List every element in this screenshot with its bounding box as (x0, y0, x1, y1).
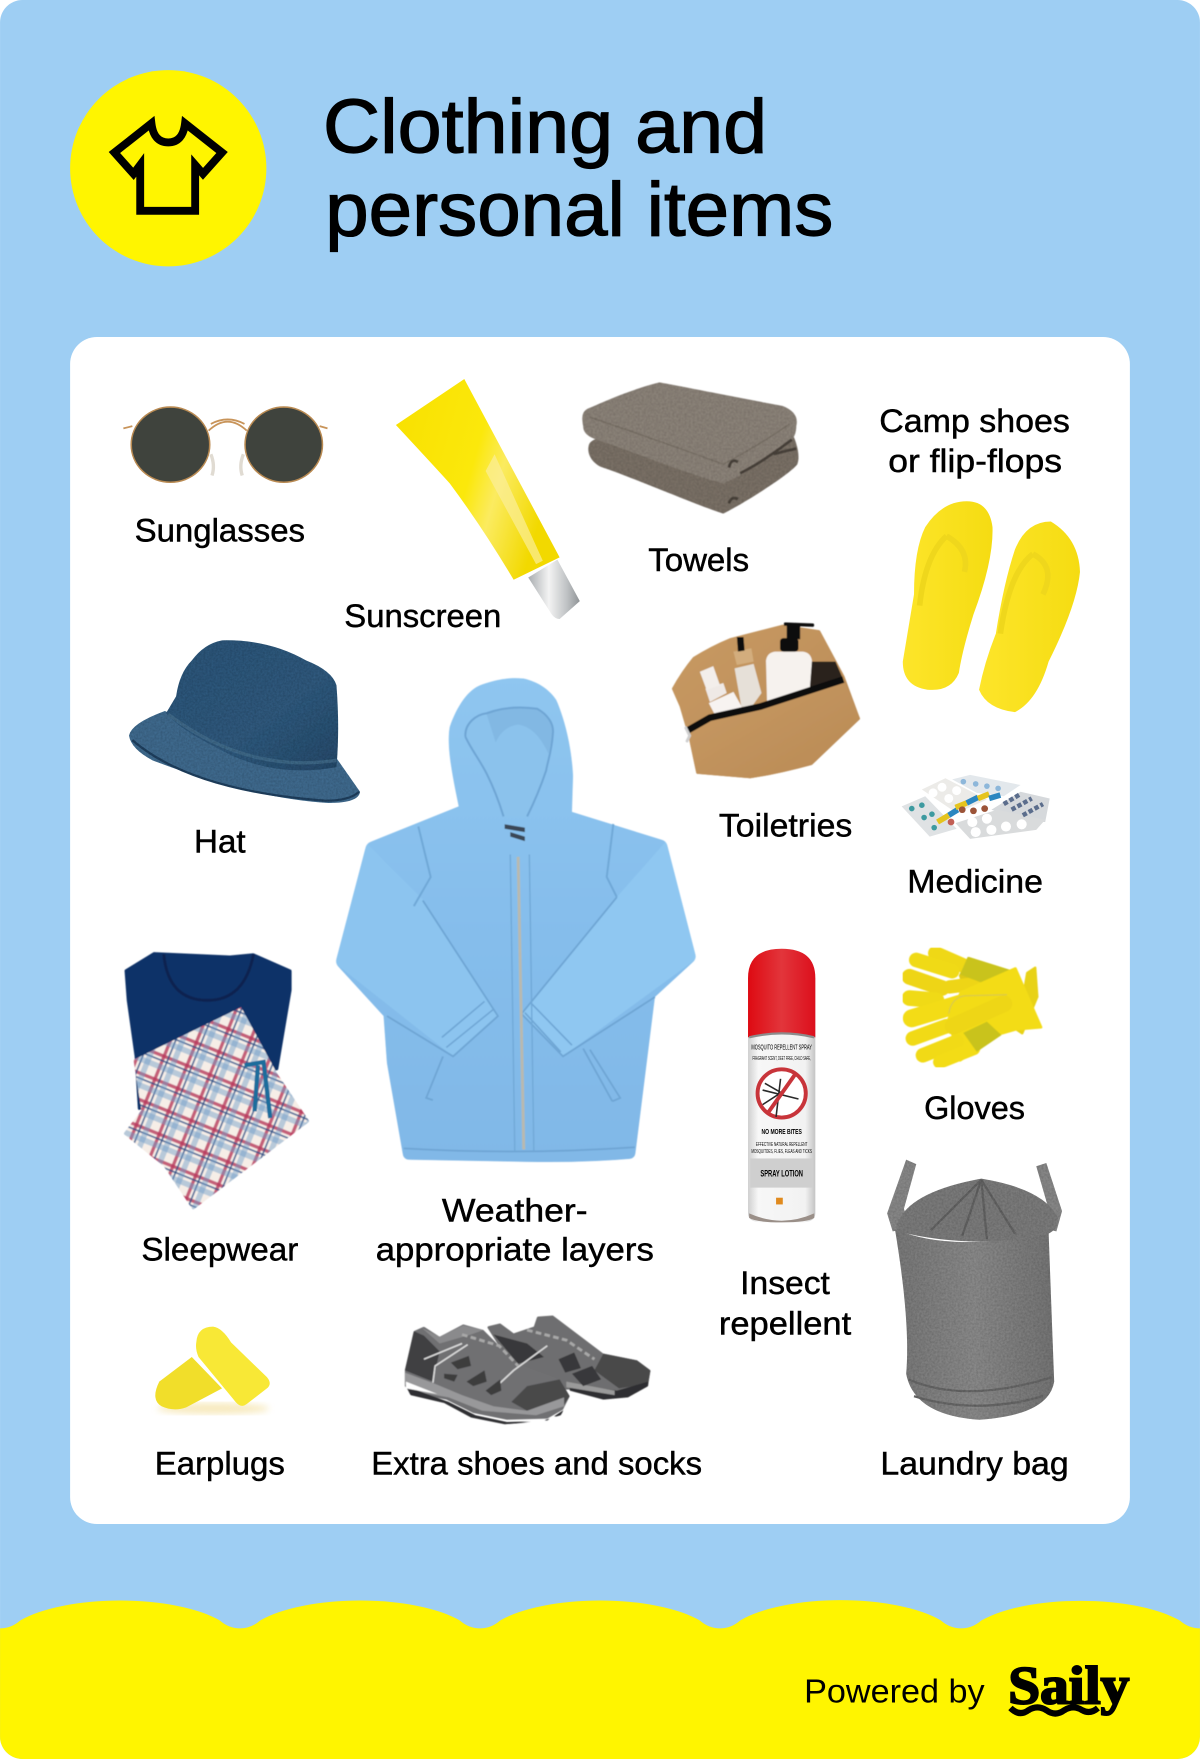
text: Earplugs: Earplugs (155, 1446, 285, 1482)
text: Weather-appropriate layers: appropriate layers (376, 1232, 654, 1268)
icon: insect repellent spray can (748, 949, 815, 1222)
icon: bucket hat (129, 640, 360, 803)
text: Weather-appropriate layers: Weather- (442, 1192, 588, 1228)
icon: insect repellent spray can: EFFECTIVE NATURAL REPELLENT (756, 1142, 807, 1148)
icon: sleepwear (shirt and plaid shorts) (123, 952, 310, 1210)
icon: hiking shoes (405, 1315, 650, 1424)
text: Gloves: Gloves (924, 1090, 1025, 1126)
text: Hat: Hat (194, 823, 246, 859)
text: Toiletries: Toiletries (719, 808, 852, 844)
text: Camp shoes or flip-flops (879, 403, 1070, 479)
text: Sunscreen: Sunscreen (344, 598, 501, 634)
icon: sunscreen tube (396, 379, 580, 619)
text: Sleepwear: Sleepwear (141, 1232, 299, 1268)
text: Camp shoes or flip-flops: or flip-flops (888, 443, 1062, 479)
text: Insect repellent (719, 1265, 851, 1342)
icon: insect repellent spray can: NO MORE BITES (761, 1127, 802, 1136)
icon: medicine blister packs (902, 775, 1050, 839)
icon: earplugs (155, 1327, 270, 1414)
text: Insect repellent: repellent (719, 1306, 851, 1342)
icon: laundry bag (887, 1160, 1062, 1420)
text: Weather-appropriate layers (376, 1192, 654, 1268)
text: Sunglasses: Sunglasses (135, 513, 305, 549)
icon: insect repellent spray can: MOSQUITO REPELLENT SPRAY (751, 1043, 812, 1052)
icon: toiletries bag (672, 622, 860, 778)
text: Laundry bag: Laundry bag (880, 1446, 1069, 1482)
text: Camp shoes or flip-flops: Camp shoes (879, 403, 1070, 439)
title: Clothing and (323, 85, 767, 170)
text: Extra shoes and socks: Extra shoes and socks (371, 1446, 702, 1482)
icon: insect repellent spray can: MOSQUITOES, FLIES, FLEAS AND TICKS (751, 1149, 812, 1155)
footer: yellow wave band (0, 1600, 1200, 1759)
icon: blue rain jacket (335, 678, 696, 1162)
text: Towels: Towels (648, 542, 749, 578)
title: personal items (325, 168, 833, 253)
icon: insect repellent spray can: SPRAY LOTION (760, 1168, 803, 1178)
icon: towels (582, 382, 798, 514)
icon: sunglasses (123, 407, 327, 482)
logo: Saily: Saily (1008, 1655, 1129, 1715)
icon: insect repellent spray can: FRAGRANT SCENT, DEET FREE, CHILD SAFE, (753, 1056, 811, 1062)
text: Insect repellent: Insect (740, 1265, 830, 1301)
title (323, 85, 833, 253)
icon: flip-flops (903, 501, 1080, 712)
text: Medicine: Medicine (907, 864, 1043, 900)
icon: yellow work gloves (910, 953, 1043, 1062)
text: Powered by: Powered by (804, 1673, 985, 1710)
panel: items (70, 337, 1130, 1524)
icon: yellow circle with t-shirt (70, 70, 266, 266)
